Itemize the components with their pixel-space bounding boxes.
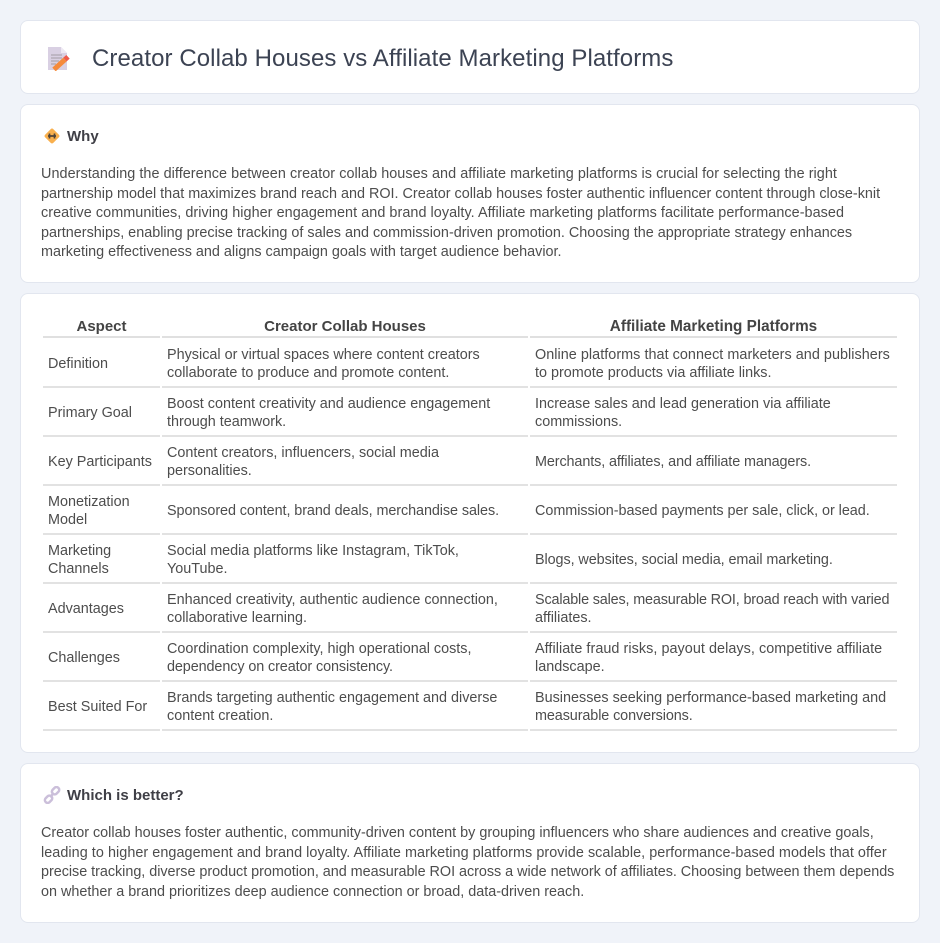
text: which is better paragraph: on whether a brand prioritizes deep audience connection or broad, data-driven reach.	[41, 884, 584, 900]
text: why paragraph	[41, 166, 880, 260]
row: advantages: affiliates.	[535, 610, 592, 626]
text: why paragraph: creative communities, driving higher engagement and brand loyalty. Affiliate marketing platforms facilitate performance-based	[41, 205, 844, 221]
panel: comparison table	[20, 293, 920, 753]
panel: title	[20, 20, 920, 94]
row: monetization model	[43, 494, 897, 535]
row: challenges: Challenges	[48, 650, 120, 666]
row: primary goal: commissions.	[535, 414, 622, 430]
row: primary goal: through teamwork.	[167, 414, 286, 430]
row: definition: Physical or virtual spaces where content creators	[167, 347, 480, 363]
row: primary goal: Boost content creativity and audience engagement	[167, 396, 490, 412]
row: primary goal: Primary Goal	[48, 405, 132, 421]
row: challenges: Coordination complexity, high operational costs,	[167, 641, 472, 657]
icon: link	[44, 786, 60, 804]
row: challenges: dependency on creator consistency.	[167, 659, 393, 675]
text: why paragraph: partnerships, enabling precise tracking of sales and commission-driven promotion. Choosing the appropriate strategy enhances	[41, 225, 852, 241]
text: why paragraph: partnership model that maximizes brand reach and ROI. Creator collab houses foster authentic influencer content through close-knit	[41, 186, 880, 202]
row: monetization model: Monetization	[48, 494, 130, 510]
table header: affiliate marketing platforms: Affiliate Marketing Platforms	[610, 318, 817, 335]
text: why paragraph: marketing effectiveness and aligns campaign goals with target audience behavior.	[41, 244, 562, 260]
text: which is better paragraph	[41, 825, 894, 900]
row: best suited for	[43, 690, 897, 731]
row: best suited for: Best Suited For	[48, 699, 147, 715]
text: which is better paragraph: Creator collab houses foster authentic, community-driven content by grouping influencers who share audiences and creative goals,	[41, 825, 874, 841]
heading: why: Why	[67, 128, 99, 145]
row: advantages: Enhanced creativity, authentic audience connection,	[167, 592, 498, 608]
row: advantages	[43, 592, 897, 633]
row: key participants: Key Participants	[48, 454, 152, 470]
row: best suited for: Brands targeting authentic engagement and diverse	[167, 690, 497, 706]
table header: creator collab houses	[162, 318, 528, 338]
row: primary goal: Increase sales and lead generation via affiliate	[535, 396, 831, 412]
row: monetization model: Model	[48, 512, 87, 528]
row: marketing channels: Blogs, websites, social media, email marketing.	[535, 552, 833, 568]
panel: why	[20, 104, 920, 283]
table header: creator collab houses: Creator Collab Houses	[264, 318, 426, 335]
row: monetization model: Sponsored content, brand deals, merchandise sales.	[167, 503, 499, 519]
row: challenges: Affiliate fraud risks, payout delays, competitive affiliate	[535, 641, 882, 657]
row: definition: Definition	[48, 356, 108, 372]
row: advantages: collaborative learning.	[167, 610, 307, 626]
icon: document with pencil	[48, 47, 70, 71]
table header: aspect: Aspect	[76, 318, 127, 335]
row: definition: collaborate to produce and promote content.	[167, 365, 449, 381]
heading: which is better: Which is better?	[67, 787, 184, 804]
row: advantages: Advantages	[48, 601, 124, 617]
row: marketing channels: Marketing	[48, 543, 111, 559]
row: key participants: Merchants, affiliates, and affiliate managers.	[535, 454, 811, 470]
row: key participants: personalities.	[167, 463, 252, 479]
row: advantages: Scalable sales, measurable ROI, broad reach with varied	[535, 592, 889, 608]
row: key participants	[43, 445, 897, 486]
panel: which is better	[20, 763, 920, 923]
row: challenges: landscape.	[535, 659, 605, 675]
icon: warning diamond	[44, 128, 60, 144]
row: definition: to promote products via affiliate links.	[535, 365, 772, 381]
text: which is better paragraph: precise tracking, diverse product promotion, and measurable ROI across a wide network of affiliates. Choosing between them depends	[41, 864, 894, 880]
row: definition: Online platforms that connect marketers and publishers	[535, 347, 890, 363]
row: primary goal	[43, 396, 897, 437]
row: best suited for: content creation.	[167, 708, 273, 724]
row: monetization model: Commission-based payments per sale, click, or lead.	[535, 503, 870, 519]
row: challenges	[43, 641, 897, 682]
row: key participants: Content creators, influencers, social media	[167, 445, 439, 461]
row: marketing channels: Channels	[48, 561, 109, 577]
row: marketing channels: YouTube.	[167, 561, 228, 577]
row: best suited for: measurable conversions.	[535, 708, 693, 724]
text: why paragraph: Understanding the difference between creator collab houses and affiliate marketing platforms is crucial for selecting the right	[41, 166, 837, 182]
row: best suited for: Businesses seeking performance-based marketing and	[535, 690, 886, 706]
row: marketing channels	[43, 543, 897, 584]
title: Creator Collab Houses vs Affiliate Marketing Platforms	[92, 45, 673, 72]
text: which is better paragraph: leading to higher engagement and brand loyalty. Affiliate marketing platforms provide scalable, performance-based models that offer	[41, 845, 887, 861]
row: marketing channels: Social media platforms like Instagram, TikTok,	[167, 543, 459, 559]
table header: affiliate marketing platforms	[530, 318, 897, 338]
table header: aspect	[43, 318, 160, 338]
row: definition	[43, 347, 897, 388]
